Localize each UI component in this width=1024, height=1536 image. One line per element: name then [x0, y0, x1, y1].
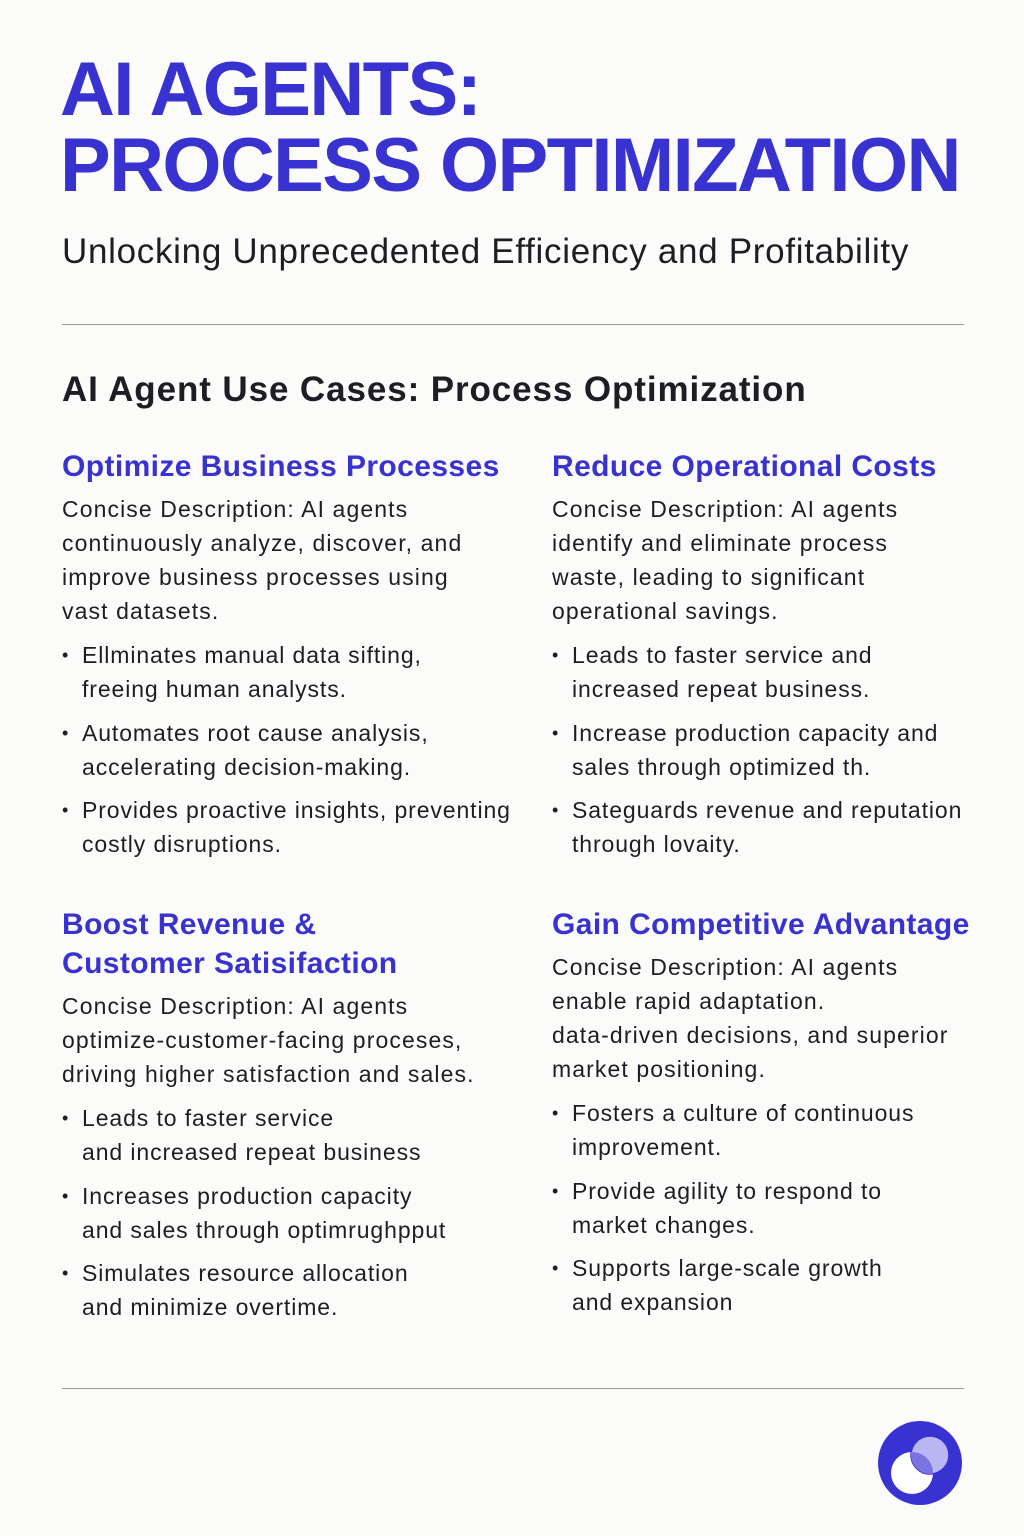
panel: boost revenue: driving higher satisfaction and sales.	[62, 1061, 475, 1087]
panel: boost revenue: and sales through optimrughpput	[82, 1216, 446, 1242]
panel: boost revenue: and increased repeat business	[82, 1139, 421, 1165]
panel: competitive advantage: and expansion	[572, 1289, 733, 1315]
panel: boost revenue: optimize-customer-facing proceses,	[62, 1027, 462, 1053]
panel: reduce operational costs: Leads to faster service and	[572, 642, 872, 668]
panel: optimize business processes: accelerating decision-making.	[82, 754, 411, 780]
panel: competitive advantage: Fosters a culture of continuous	[572, 1100, 914, 1126]
panel: optimize business processes: Provides proactive insights, preventing	[82, 797, 511, 823]
panel: competitive advantage: market changes.	[572, 1212, 756, 1238]
panel: competitive advantage: Gain Competitive Advantage	[552, 908, 970, 941]
panel: optimize business processes	[62, 450, 511, 857]
section heading: AI Agent Use Cases: Process Optimization	[62, 370, 807, 409]
panel: reduce operational costs: Concise Description: AI agents	[552, 496, 898, 522]
title: AI AGENTS:	[60, 47, 480, 132]
panel: optimize business processes: Automates root cause analysis,	[82, 720, 429, 746]
subtitle: Unlocking Unprecedented Efficiency and Profitability	[62, 232, 909, 271]
panel: competitive advantage: improvement.	[572, 1134, 722, 1160]
panel: boost revenue: Concise Description: AI agents	[62, 993, 408, 1019]
panel: reduce operational costs: Increase production capacity and	[572, 720, 938, 746]
panel: reduce operational costs: waste, leading to significant	[552, 564, 865, 590]
panel: boost revenue	[62, 908, 475, 1320]
icon: logo	[878, 1421, 962, 1505]
panel: reduce operational costs: identify and eliminate process	[552, 530, 888, 556]
title: PROCESS OPTIMIZATION	[60, 123, 960, 208]
panel: optimize business processes: freeing human analysts.	[82, 676, 347, 702]
panel: reduce operational costs	[552, 450, 962, 857]
panel: boost revenue: Increases production capacity	[82, 1182, 412, 1208]
panel: competitive advantage: enable rapid adaptation.	[552, 988, 825, 1014]
panel: competitive advantage: Concise Description: AI agents	[552, 954, 898, 980]
panel: reduce operational costs: Reduce Operational Costs	[552, 450, 937, 483]
panel: boost revenue: and minimize overtime.	[82, 1294, 338, 1320]
title	[60, 47, 960, 208]
panel: competitive advantage: market positioning.	[552, 1056, 766, 1082]
panel: boost revenue: Customer Satisifaction	[62, 947, 398, 980]
panel: reduce operational costs: increased repeat business.	[572, 676, 870, 702]
panel: reduce operational costs: Sateguards revenue and reputation	[572, 797, 962, 823]
panel: optimize business processes: costly disruptions.	[82, 831, 282, 857]
panel: competitive advantage: Provide agility to respond to	[572, 1178, 882, 1204]
panel: optimize business processes: Concise Description: AI agents	[62, 496, 408, 522]
panel: reduce operational costs: operational savings.	[552, 598, 779, 624]
panel: optimize business processes: Optimize Business Processes	[62, 450, 500, 483]
panel: reduce operational costs: sales through optimized th.	[572, 754, 871, 780]
panel: reduce operational costs: through lovaity.	[572, 831, 741, 857]
panel: competitive advantage: data-driven decisions, and superior	[552, 1022, 948, 1048]
panel: optimize business processes: continuously analyze, discover, and	[62, 530, 462, 556]
panel: boost revenue: Boost Revenue &	[62, 908, 316, 941]
panel: optimize business processes: vast datasets.	[62, 598, 219, 624]
panel: optimize business processes: improve business processes using	[62, 564, 449, 590]
panel: competitive advantage: Supports large-scale growth	[572, 1255, 883, 1281]
panel: boost revenue: Leads to faster service	[82, 1105, 334, 1131]
panel: competitive advantage	[552, 908, 970, 1315]
panel: boost revenue: Simulates resource allocation	[82, 1260, 409, 1286]
panel: optimize business processes: Ellminates manual data sifting,	[82, 642, 422, 668]
